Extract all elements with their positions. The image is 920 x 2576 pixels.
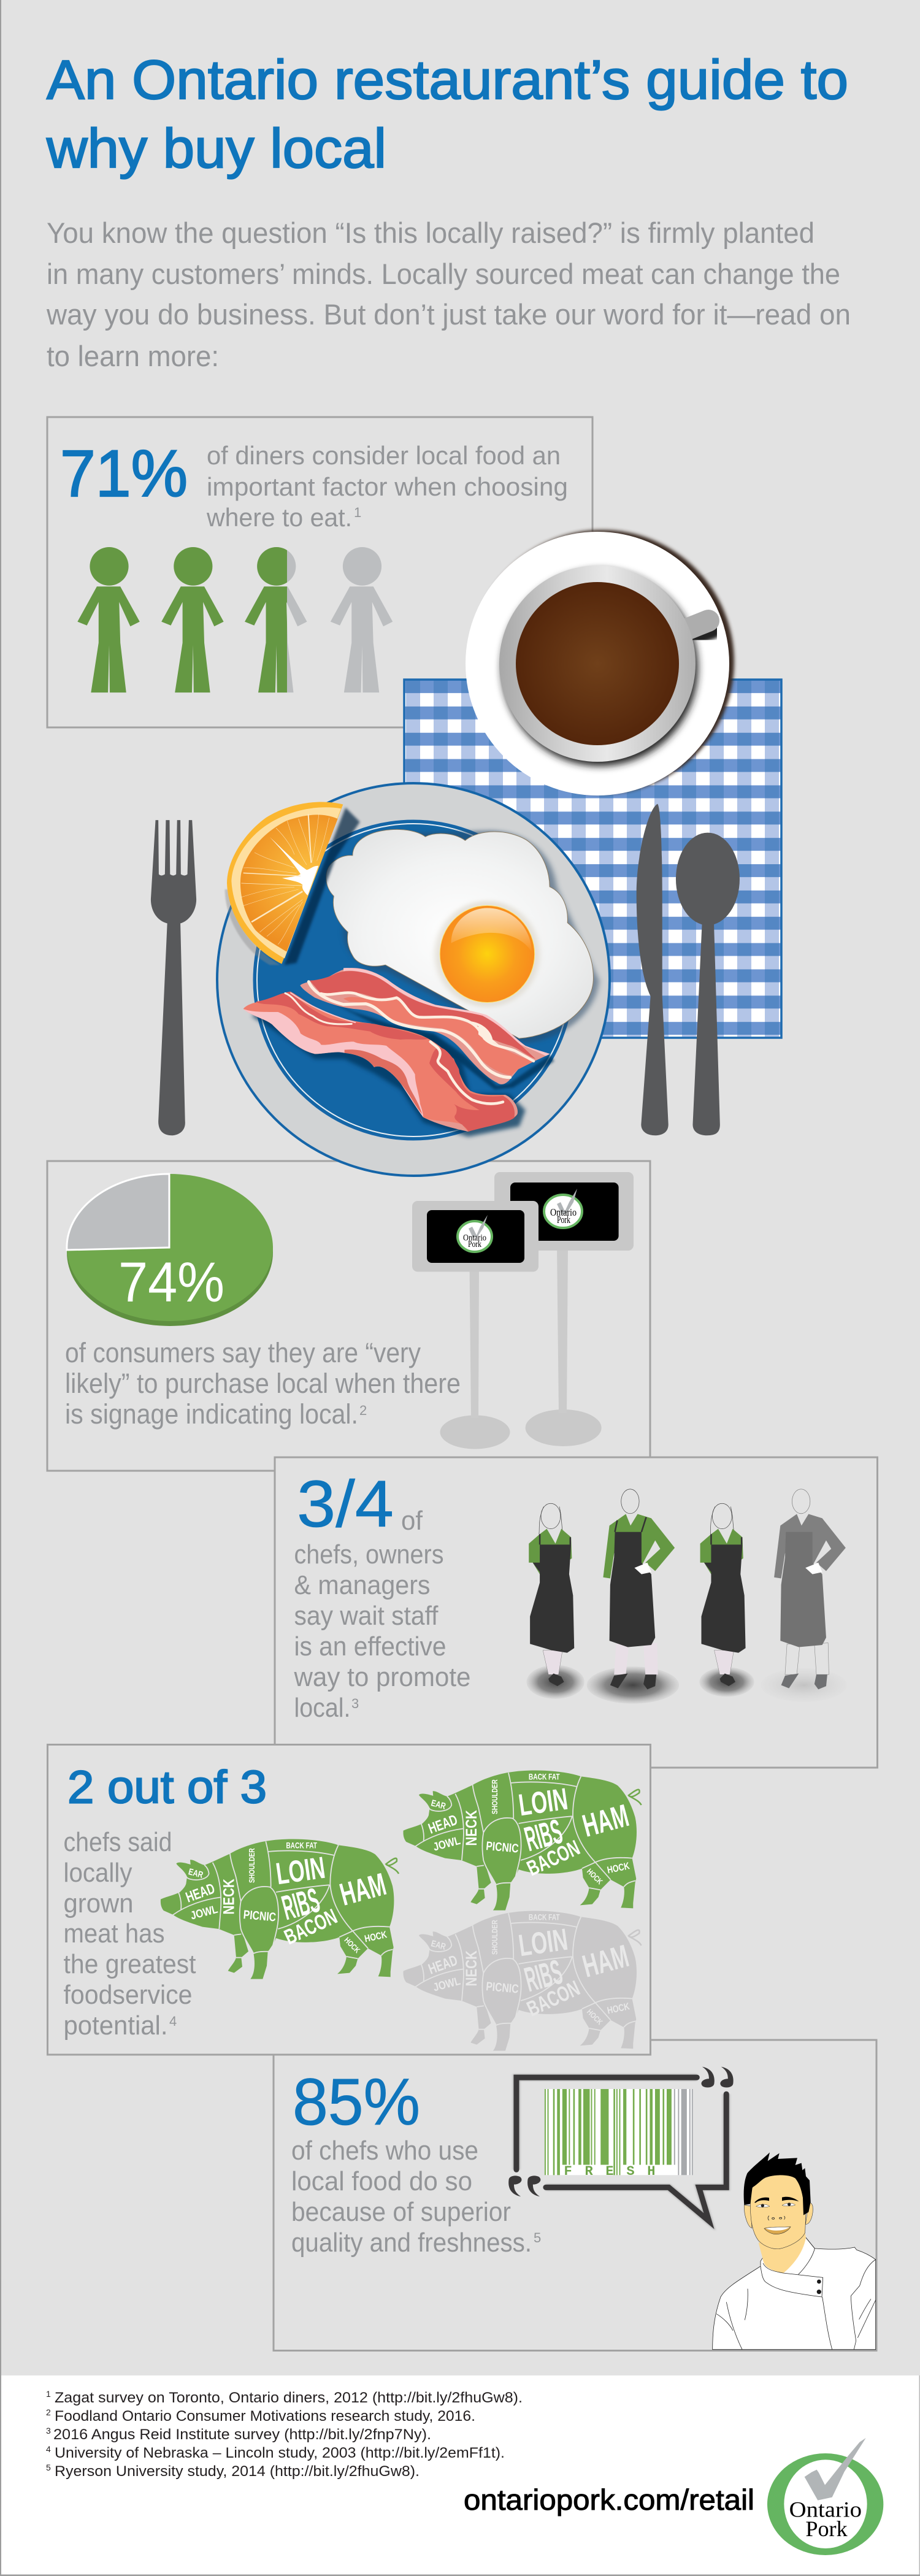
icon: grey pig cuts: HEAD [426,1952,460,1978]
illustration: smiling chef [713,2152,876,2350]
panel: 3/4 of chefs, owners and managers [275,1457,877,1768]
icon: grey pig cuts: BACK FAT [529,1912,560,1922]
panel: 74% of consumers [47,1161,650,1471]
title: An Ontario restaurant’s guide to [47,50,848,111]
icon: grey pig cuts: LOIN [516,1922,570,1963]
icon: green pig cuts, upper right: SHOULDER [490,1779,499,1814]
bacon shadow [251,989,554,1137]
footnotes: University of Nebraska – Lincoln study, 2003 (http://bit.ly/2emFf1t). [55,2445,505,2461]
text: wait staff: local. [294,1693,351,1723]
egg shadow [343,830,599,1043]
text: locally grown meat [64,1827,196,2041]
icon: back sign on stand: Ontario [550,1206,577,1218]
icon: green pig cuts, upper right [403,1770,642,1911]
icon: green pig cuts, lower left: JOWL [189,1903,219,1922]
icon: green pig cuts, lower left: NECK [221,1879,237,1914]
icon: green pig cuts, lower left: HEAD [183,1880,217,1906]
pie chart: 74%: 74% [118,1251,224,1314]
icon: green pig cuts, upper right: HOCK [607,1861,631,1876]
text: wait staff: 3 [351,1696,359,1711]
text: locally grown meat: 4 [169,2014,177,2029]
text: consumers signage: is signage indicating local. [65,1398,358,1430]
footnotes: 1 [46,2389,51,2399]
logo: Ontario Pork: Ontario [789,2497,862,2521]
text: chefs who use local food: 5 [534,2230,541,2245]
icon: knife [637,804,669,1135]
text: wait staff: & managers [294,1570,431,1600]
text: locally grown meat: potential. [64,2011,168,2041]
icon: green pig cuts, upper right: EAR [430,1798,447,1812]
icon: front sign on stand: Pork [468,1240,481,1249]
intro text: You know the question “Is this locally raised?” is firmly planted [47,217,815,249]
text: consumers signage: likely” to purchase local when there [65,1368,461,1399]
icon: green pig cuts, upper right: LOIN [516,1782,570,1822]
illustration: coffee cup on saucer [466,530,734,795]
icon: fork [151,820,196,1135]
icon: back sign on stand [494,1172,634,1446]
text: wait staff [294,1506,471,1723]
text: chefs who use local food: local food do so [291,2166,472,2196]
icon: green pig cuts, lower left [161,1839,399,1979]
icon: grey pig cuts: SHOULDER [490,1920,499,1955]
stat: 71%: 71% [60,436,188,510]
footnotes: 3 [46,2426,51,2436]
icon: speech bubble with barcode: FRESH [564,2164,655,2179]
logo: Ontario Pork: Pork [805,2517,848,2541]
footnotes: 5 [46,2463,51,2472]
text: consumers signage [65,1337,461,1430]
icon: green pig cuts, lower left: RIBS [278,1881,324,1928]
icon: front sign on stand [412,1201,539,1449]
text: diners consider local food [206,441,568,532]
text: locally grown meat: meat has [64,1919,164,1949]
title: why buy local [46,118,386,180]
icon: green pig cuts, upper right: JOWL [432,1834,462,1853]
footnotes: 2016 Angus Reid Institute survey (http://bit.ly/2fnp7Ny). [53,2426,431,2443]
icon: grey pig cuts: BACON [523,1976,583,2021]
icon: green pig cuts, lower left: SHOULDER [247,1848,256,1883]
icon: green pig cuts, upper right: HAM [579,1797,632,1844]
text: diners consider local food: 1 [354,505,361,520]
figure: waiter in grey [761,1489,847,1702]
panel: 2 out of 3 chefs [48,1744,650,2055]
text: chefs who use local food: of chefs who use [291,2136,478,2166]
text: wait staff: say wait staff [294,1601,439,1631]
footnotes: 2 [46,2407,51,2417]
logo: Ontario Pork [767,2438,883,2555]
icon: grey pig cuts: JOWL [432,1974,462,1994]
footer [0,2375,920,2576]
text: chefs who use local food: because of superior [291,2197,511,2227]
illustration: plate with egg, bacon and orange [217,783,610,1176]
icon: front sign on stand: Ontario [463,1233,486,1243]
icon: grey pig cuts: PICNIC [485,1980,519,1996]
icon: green pig cuts, upper right: RIBS [521,1812,566,1859]
text: locally grown meat: grown [64,1888,134,1919]
website url: ontariopork.com/retail [464,2483,754,2516]
intro text: way you do business. But don’t just take our word for it—read on [46,298,851,331]
icon: green pig cuts, lower left: HOCK [342,1936,362,1955]
intro text: to learn more: [47,340,219,372]
text: locally grown meat: the greatest [64,1949,196,1979]
text: locally grown meat: locally [64,1858,132,1888]
text: locally grown meat: foodservice [64,1980,193,2010]
text: chefs who use local food: quality and freshness. [291,2228,532,2258]
footnotes: Zagat survey on Toronto, Ontario diners, 2012 (http://bit.ly/2fhuGw8). [55,2390,523,2406]
illustration: four staff in aprons [526,1489,847,1704]
footnotes [46,2389,523,2480]
icon: green pig cuts, lower left: PICNIC [243,1908,277,1925]
bacon strip upper [300,968,550,1084]
footnotes: Ryerson University study, 2014 (http://bit.ly/2fhuGw8). [55,2463,420,2480]
icon: green pig cuts, lower left: BACK FAT [286,1840,317,1850]
icon: green pig cuts, lower left: BACON [281,1904,341,1949]
icon: green pig cuts, lower left: EAR [187,1867,204,1880]
plate [217,783,610,1176]
icon: green pig cuts, lower left: HAM [336,1866,389,1912]
icon: grey pig cuts: NECK [464,1950,480,1986]
icon: green pig cuts, upper right: HOCK [585,1867,605,1887]
bacon strip lower [243,992,518,1132]
text: consumers signage: 2 [359,1403,367,1418]
text: wait staff: is an effective [294,1631,447,1662]
icon: green pig cuts, upper right: HEAD [426,1812,460,1838]
text: diners consider local food: where to eat. [206,503,352,532]
footnotes: 4 [46,2444,51,2454]
text: chefs who use local food [291,2136,541,2258]
title [46,50,848,180]
icon: speech bubble with barcode [508,2067,734,2221]
figure: waitress one [526,1503,585,1699]
figure: waitress two [699,1503,754,1696]
icon: green pig cuts, upper right: PICNIC [485,1839,519,1856]
text: diners consider local food: of diners consider local food an [207,441,561,470]
figure: waiter one [587,1489,679,1704]
icon: green pig cuts, upper right: NECK [464,1810,480,1846]
icon: grey pig cuts: HOCK [607,2001,631,2016]
icon: green pig cuts, lower left: LOIN [274,1850,328,1891]
icon: grey pig cuts: RIBS [521,1953,566,1999]
icon: grey pig cuts: HOCK [585,2007,605,2027]
stat: 2 out of 3: 2 out of 3 [67,1761,267,1813]
text: wait staff: of [401,1506,423,1536]
stat: 3/4: 3/4 [297,1466,394,1541]
icon: green pig cuts, upper right: BACK FAT [529,1771,560,1781]
text: locally grown meat: chefs said [64,1827,172,1857]
stat: 85%: 85% [293,2064,420,2139]
footnotes: Foodland Ontario Consumer Motivations research study, 2016. [55,2408,475,2425]
panel: 71% of diners [47,417,592,727]
illustration: placemat with gingham pattern [404,680,781,1038]
icon: grey pig cuts: EAR [430,1939,447,1952]
text: wait staff: chefs, owners [294,1539,444,1570]
intro text: in many customers’ minds. Locally sourced meat can change the [47,258,840,290]
orange slice [225,802,360,965]
icon: spoon [676,833,740,1135]
panel: 85% of chefs [274,2040,876,2350]
icon: grey pig cuts: HAM [579,1938,632,1984]
icon: grey pig cuts [403,1911,642,2051]
intro text [46,217,851,372]
text: consumers signage: of consumers say they are “very [65,1337,421,1368]
fried egg [326,829,593,1038]
icon: row of people, three quarters green [77,547,393,692]
icon: back sign on stand: Pork [557,1214,570,1225]
icon: green pig cuts, lower left: HOCK [364,1930,388,1944]
text: diners consider local food: important factor when choosing [207,472,568,501]
icon: green pig cuts, upper right: BACON [523,1836,583,1880]
pie chart: 74% [67,1174,273,1326]
text: wait staff: way to promote [294,1662,471,1692]
